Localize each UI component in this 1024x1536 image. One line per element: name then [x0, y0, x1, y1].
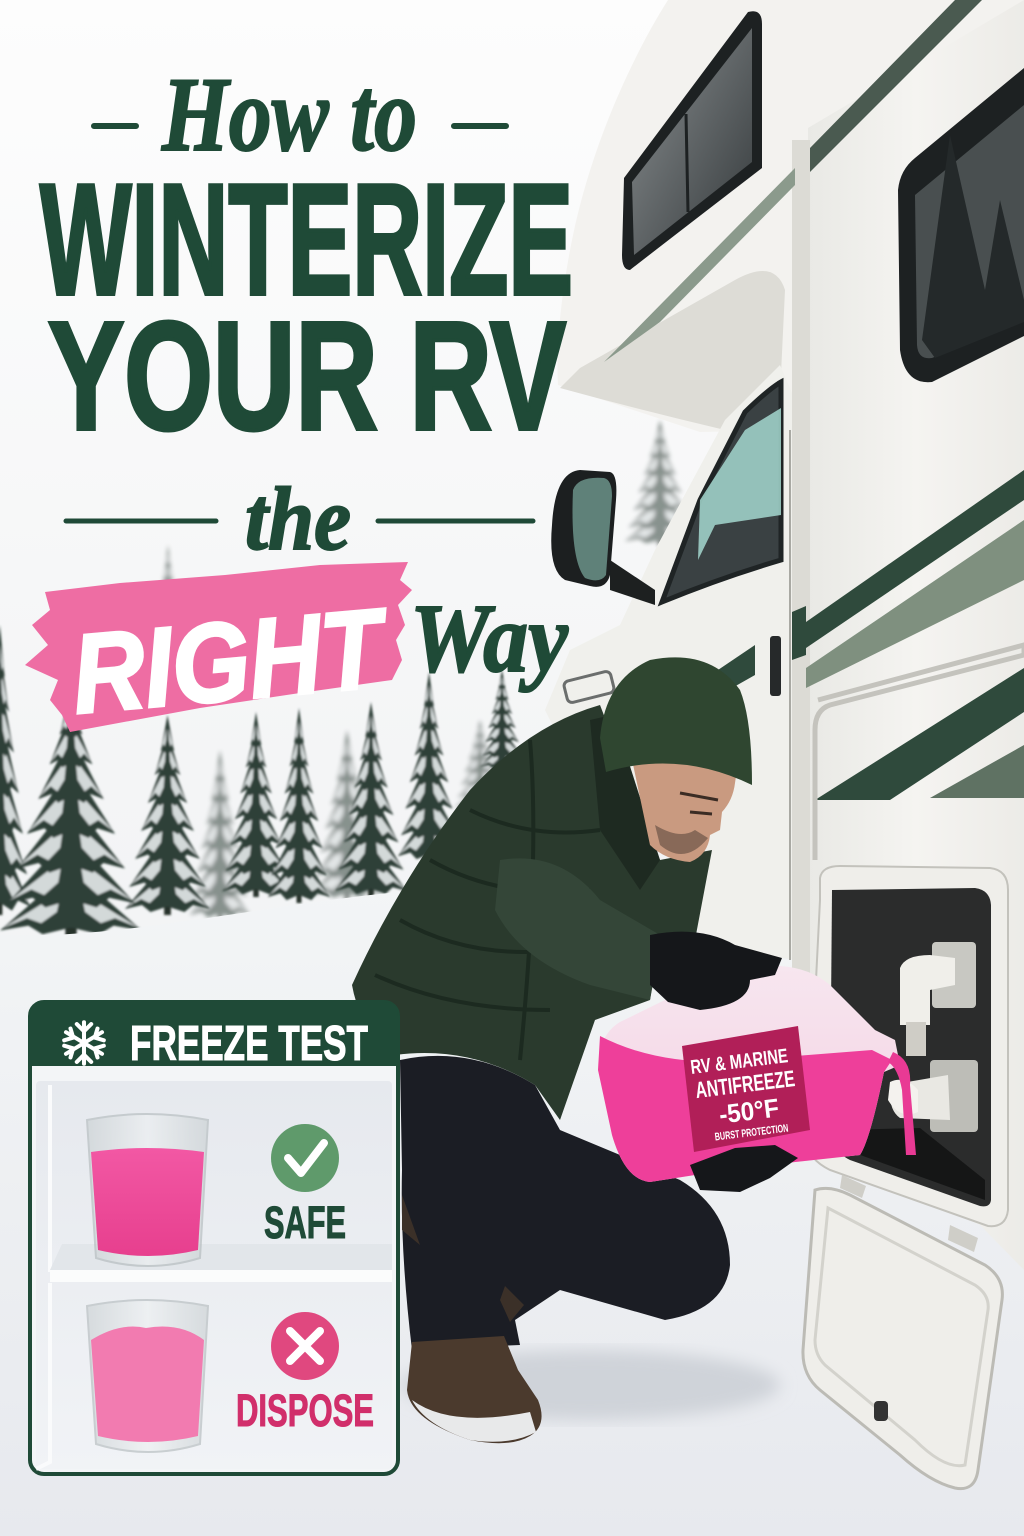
RV: upper water fitting — [900, 942, 976, 1056]
person: stubble — [655, 825, 708, 854]
RV: side mirror — [551, 470, 655, 605]
jug: lower glove — [690, 1145, 798, 1192]
RV: corner trim — [789, 430, 791, 960]
RV: lower water inlet — [890, 1060, 978, 1132]
panel: fridge interior — [36, 1081, 392, 1469]
panel: header text: FREEZE TEST — [130, 1017, 368, 1071]
background: snow ground — [0, 880, 1024, 1536]
panel: fridge shelf — [50, 1244, 392, 1270]
jug: upper glove — [650, 932, 782, 1010]
jug: translucent top — [598, 966, 900, 1182]
person: green beanie — [600, 657, 752, 785]
RV: upper left window — [622, 11, 762, 270]
person: jacket quilting — [375, 740, 600, 1060]
title: right: RIGHT — [67, 585, 395, 737]
background: snowy pine forest — [0, 420, 695, 938]
RV: hatch latch — [874, 1401, 888, 1421]
person: collar — [590, 715, 660, 890]
person: black trousers — [400, 1056, 730, 1350]
icon: red x — [271, 1312, 339, 1380]
icon: green check — [271, 1124, 339, 1192]
RV: overcab and upper body — [558, 0, 1024, 432]
RV: bay floor — [838, 1128, 985, 1200]
jug: pink liquid — [598, 1036, 892, 1182]
title: how to: How to — [161, 56, 417, 173]
glass: frozen slush — [87, 1300, 208, 1452]
RV: service bay interior — [830, 888, 991, 1206]
person: brow and eye — [680, 793, 718, 814]
RV: lower storage panel — [815, 645, 1024, 860]
person: boot sole snow — [412, 1400, 536, 1442]
person: arm — [495, 858, 660, 1000]
RV: open hatch door — [803, 1175, 1002, 1489]
RV: door handle — [770, 636, 781, 696]
RV: cab window — [662, 382, 781, 602]
RV: service bay frame — [808, 866, 1008, 1226]
title: your rv: YOUR RV — [48, 290, 566, 462]
RV: hatch hinges — [840, 1175, 978, 1252]
jug: label: ANTIFREEZE — [694, 1065, 796, 1103]
jug: cap — [888, 1080, 918, 1114]
person: brown boot — [407, 1336, 542, 1443]
label: safe: SAFE — [264, 1197, 346, 1248]
jug: label: BURST PROTECTION — [714, 1123, 789, 1143]
jug: label — [682, 1026, 810, 1152]
title: winterize: WINTERIZE — [40, 152, 573, 328]
title: way: Way — [410, 585, 568, 693]
jug: pouring antifreeze stream — [888, 1052, 916, 1155]
glass: safe liquid — [87, 1114, 208, 1266]
title block — [25, 56, 573, 737]
person: quilted green jacket — [352, 705, 712, 1120]
title: pink brush stroke — [25, 562, 412, 732]
RV: cab-over underside — [560, 271, 785, 430]
person: ground shadow — [400, 1350, 780, 1420]
RV: main body side wall — [790, 0, 1024, 1270]
jug: label: RV & MARINE — [689, 1045, 789, 1079]
panel: header bar — [30, 1002, 398, 1066]
antifreeze jug — [598, 932, 918, 1192]
title: the: the — [245, 470, 351, 569]
RV: decorative stripes — [604, 0, 1024, 860]
person: face — [630, 750, 740, 862]
icon: snowflake — [64, 1022, 104, 1064]
person: back boot — [402, 1195, 524, 1322]
jug: label: -50°F — [717, 1093, 781, 1130]
person: kneeling man — [352, 657, 780, 1443]
RV: van cab door — [545, 365, 795, 960]
RV: right window with trees — [898, 68, 1024, 382]
label: dispose: DISPOSE — [236, 1385, 374, 1436]
RV: cab emblem — [563, 671, 615, 703]
panel: freeze test — [30, 1002, 398, 1474]
